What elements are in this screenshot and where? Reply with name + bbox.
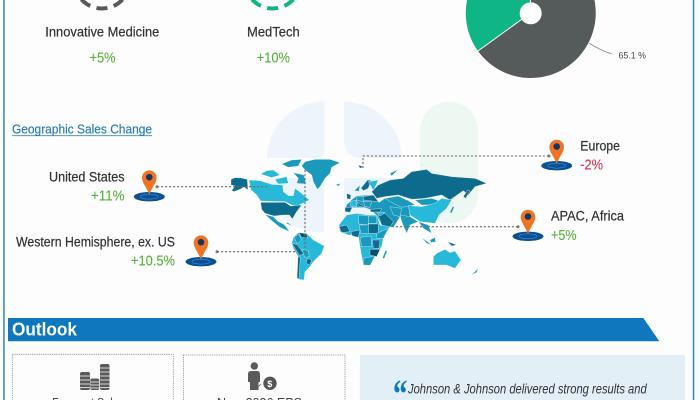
- world map: Americas: [231, 159, 340, 280]
- connector end dots: [156, 154, 550, 253]
- label: APAC, Africa: APAC, Africa: [551, 209, 624, 224]
- value: Europe change: -2%: [580, 156, 603, 173]
- icon: person with dollar coin: [248, 362, 277, 390]
- label: MedTech: MedTech: [247, 25, 300, 40]
- icon: innovative medicine dashed ring: [74, 0, 130, 8]
- label: Western Hemisphere: Western Hemisphere, ex. US: [16, 235, 175, 250]
- icon: Western Hemisphere pin: [186, 235, 216, 266]
- connector lines: [157, 156, 549, 252]
- label: Innovative Medicine: Innovative Medicine: [45, 25, 159, 40]
- icon: APAC Africa pin: [512, 210, 544, 241]
- icon: coin stacks: [80, 364, 110, 390]
- heading: Geographic Sales Change: Geographic Sales Change: [12, 122, 152, 136]
- value: Western Hemisphere change: +10.5%: [131, 252, 175, 269]
- icon: United States pin: [134, 170, 165, 201]
- value: United States change: +11%: [91, 188, 124, 205]
- pie chart: sales split: [466, 0, 646, 78]
- banner: Outlook: [8, 318, 659, 341]
- panel: forecast sales: [12, 354, 173, 400]
- banner: Outlook: Outlook: [12, 320, 78, 340]
- background logo shapes: [267, 101, 478, 233]
- label: United States: United States: [49, 170, 125, 185]
- value: Innovative Medicine change: +5%: [90, 50, 116, 67]
- pie chart: sales split: 65.1 %: [618, 50, 646, 60]
- label: Europe: Europe: [580, 139, 620, 154]
- value: APAC Africa change: +5%: [551, 227, 576, 244]
- icon: medtech dashed ring: [245, 0, 301, 8]
- panel: EPS outlook: [183, 355, 345, 400]
- value: MedTech change: +10%: [257, 50, 290, 67]
- icon: person with dollar coin: $: [267, 379, 272, 389]
- quote text: Johnson & Johnson delivered strong results and: [407, 380, 648, 396]
- panel: quote: [360, 355, 685, 400]
- world map: Europe, Africa, Asia, Oceania: [339, 163, 487, 275]
- icon: Europe pin: [541, 140, 572, 170]
